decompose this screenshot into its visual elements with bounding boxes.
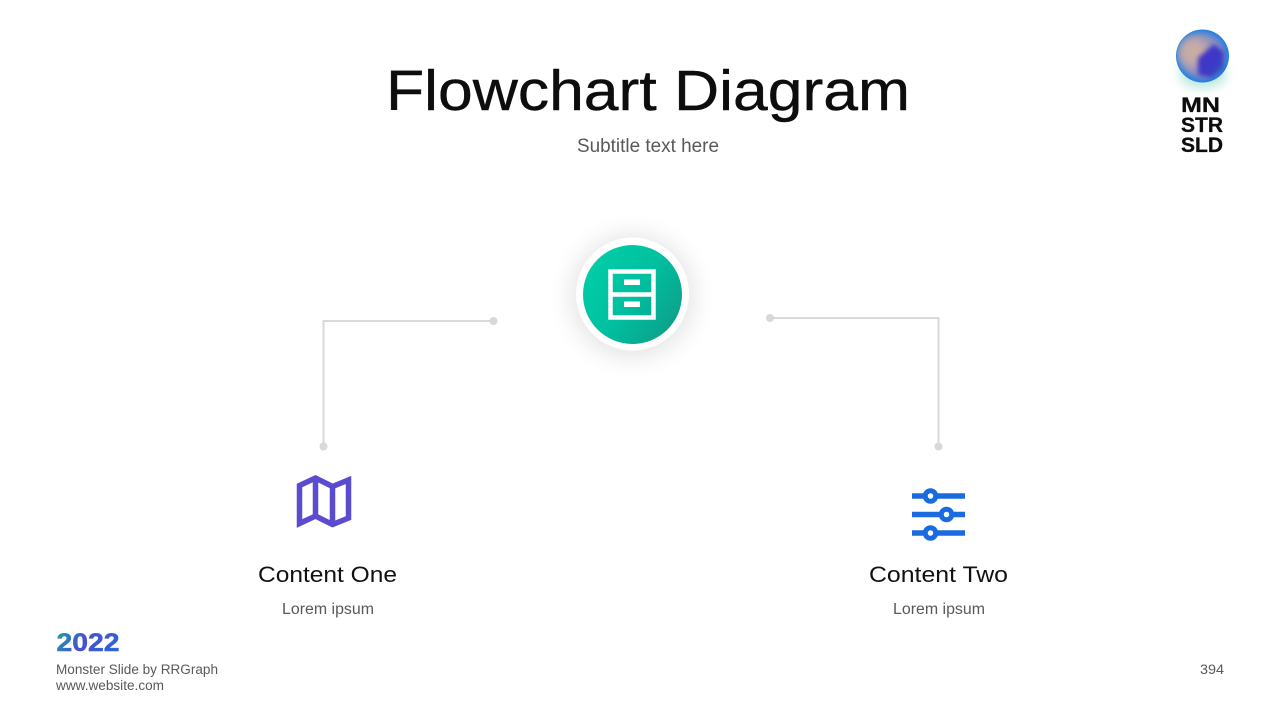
text block: Content Two: Content Two [869,562,1008,587]
logo: MN STR SLD: STR [1181,114,1223,137]
logo: MN STR SLD: SLD [1181,134,1223,157]
text block: Content One: Lorem ipsum [282,601,374,618]
text block: Content Two: Lorem ipsum [893,601,985,618]
connector: centre to Content One [320,317,498,450]
page number: 394 [1200,661,1224,677]
central icon: filing cabinet [570,234,694,358]
footer: credits: www.website.com [55,678,164,693]
footer: year: 2022 [56,629,120,657]
footer: credits [55,662,218,693]
text block: Content One [258,562,397,618]
footer: credits: Monster Slide by RRGraph [56,662,218,677]
text block: Content Two [869,562,1008,618]
connector: centre to Content Two [766,314,942,450]
title: Flowchart Diagram [386,59,910,123]
logo: MN STR SLD: MN [1181,94,1220,117]
logo: MN STR SLD [1176,30,1229,157]
icon: map [300,478,348,524]
text block: Content One: Content One [258,562,397,587]
subtitle: Subtitle text here [577,136,719,157]
icon: sliders [912,491,965,538]
